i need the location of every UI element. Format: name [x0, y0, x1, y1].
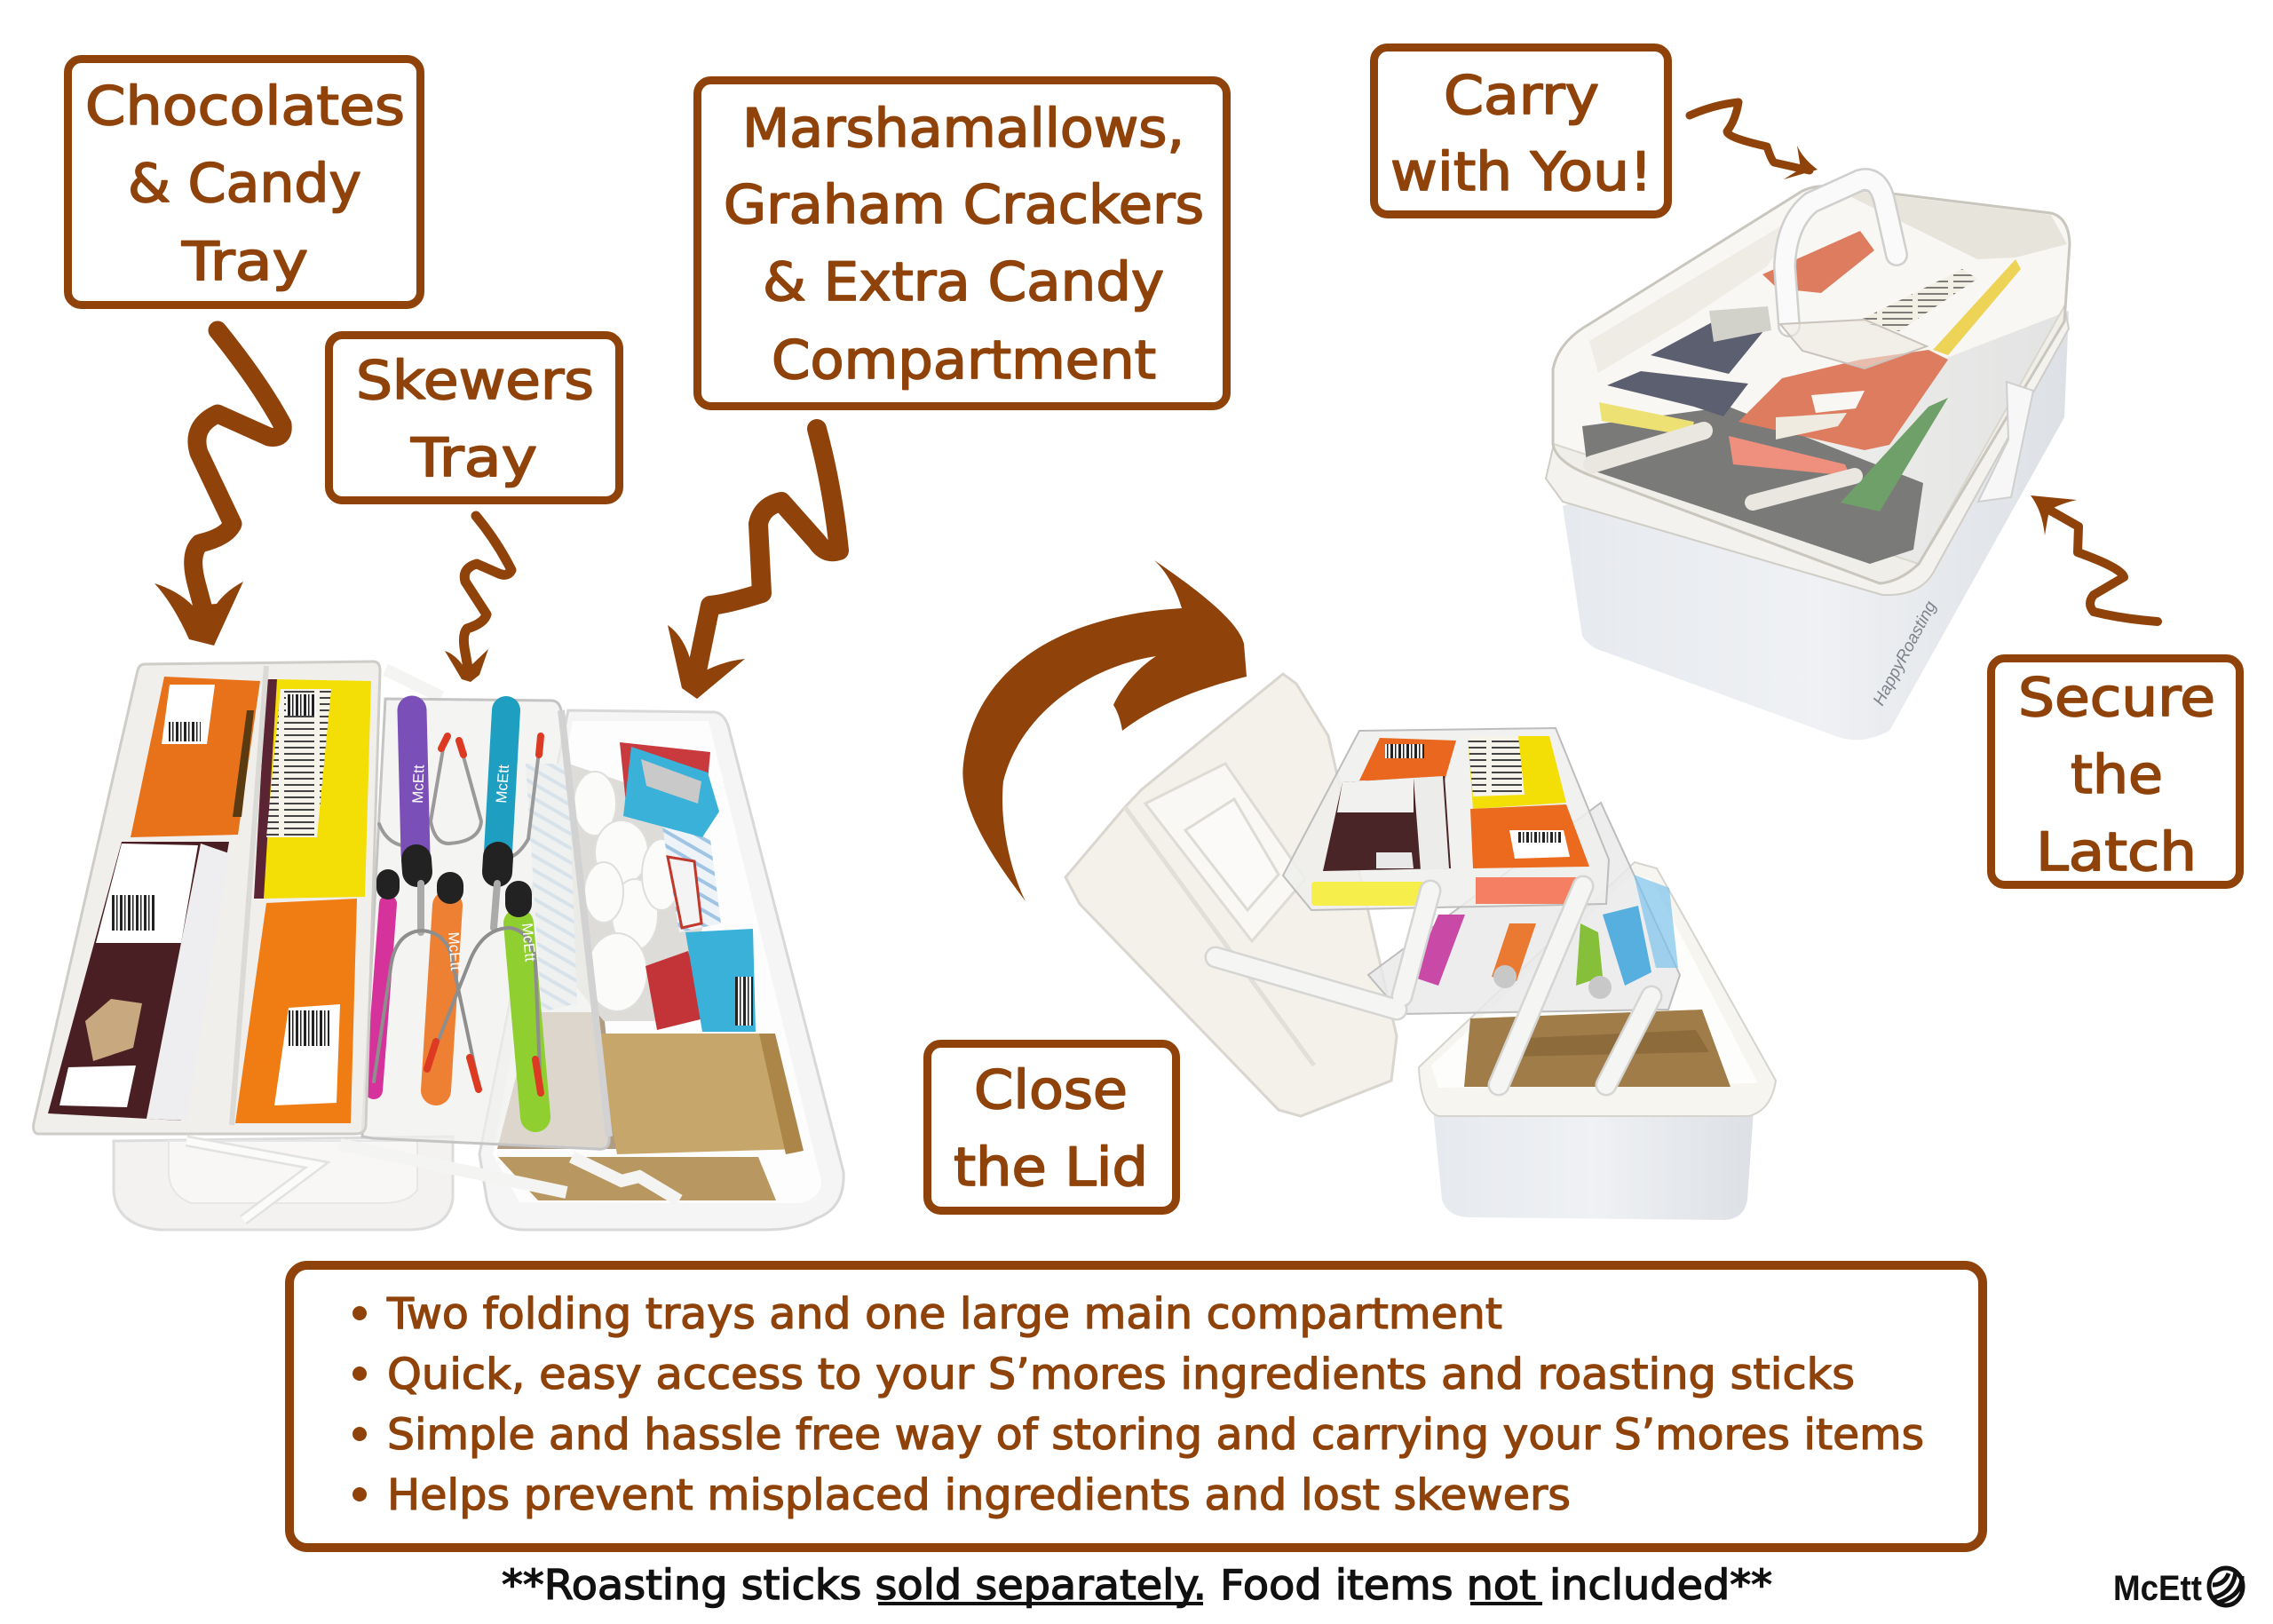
arrow: to skewers tray	[445, 516, 511, 682]
skewers tray	[362, 699, 609, 1149]
logo: McEtt: McEtt	[2113, 1569, 2202, 1608]
panel: feature list: Helps prevent misplaced ingredients and lost skewers	[387, 1470, 1571, 1520]
base	[1419, 862, 1776, 1220]
callout: secure the latch: Secure	[2018, 667, 2215, 729]
latch	[1978, 382, 2033, 502]
snack packs	[620, 742, 710, 804]
bullets	[352, 1306, 367, 1501]
arrow: secure the latch	[2031, 495, 2158, 622]
marshmallows	[568, 764, 710, 1021]
panel: feature list: Two folding trays and one large main compartment	[386, 1289, 1502, 1339]
orange bar	[131, 677, 260, 837]
callout: close the lid: Close	[974, 1059, 1128, 1121]
footnote: **Roasting sticks sold separately. Food items not included**	[502, 1561, 1772, 1609]
arrow: carry with you	[1690, 102, 1818, 179]
callout: skewers tray	[329, 336, 620, 501]
photo: closed caddy: HappyRoasting	[1870, 598, 1941, 709]
callout: skewers tray: Skewers	[356, 350, 594, 412]
callout: chocolates and candy tray: Tray	[181, 231, 308, 293]
callout: secure the latch: Latch	[2036, 821, 2197, 883]
callout: marshmallows compartment: Compartment	[772, 329, 1156, 392]
callout: marshmallows compartment: Graham Crackers	[724, 174, 1204, 236]
lower tray	[1368, 803, 1680, 1014]
arrow: to marshmallow compartment	[668, 429, 839, 699]
roasting sticks	[374, 710, 541, 1117]
contents	[1582, 231, 2021, 564]
callout: carry with you	[1374, 48, 1667, 215]
panel: feature list: Simple and hassle free way of storing and carrying your S’mores items	[387, 1410, 1924, 1460]
photo: open caddy with trays unfolded	[34, 661, 843, 1230]
yellow bar	[254, 679, 279, 899]
arrow: to chocolates tray	[154, 330, 282, 646]
skewers tray: McEtt	[409, 764, 428, 804]
callout: marshmallows compartment: & Extra Candy	[763, 251, 1164, 313]
callout: chocolates and candy tray: Chocolates	[85, 75, 405, 138]
orange bar two	[235, 899, 357, 1123]
chocolate wrapper	[48, 842, 229, 1121]
arrow: close the lid	[962, 560, 1247, 901]
base body	[1563, 311, 2069, 740]
crackers	[497, 1012, 617, 1149]
clear lid	[1553, 186, 2070, 583]
photo: half-open caddy	[1065, 674, 1776, 1220]
callout: close the lid: the Lid	[954, 1137, 1148, 1199]
chocolate tray	[34, 661, 380, 1134]
panel: feature list: Quick, easy access to your S’mores ingredients and roasting sticks	[387, 1350, 1855, 1399]
callout: secure the latch	[1991, 659, 2239, 884]
open lid	[1065, 674, 1397, 1116]
lid of open caddy	[114, 1137, 453, 1230]
callout: carry with you: with You!	[1390, 141, 1652, 203]
callout: marshmallows compartment: Marshamallows,	[742, 98, 1184, 160]
callout: secure the latch: the	[2071, 744, 2163, 806]
white support arms	[1216, 886, 1651, 1085]
panel: feature list	[289, 1265, 1983, 1548]
rim	[1546, 306, 2069, 595]
skewers tray: McEtt	[493, 764, 512, 804]
callout: carry with you: Carry	[1444, 65, 1599, 127]
skewers tray: McEtt	[445, 931, 464, 971]
carry handle	[1785, 179, 1897, 326]
callout: chocolates and candy tray: & Candy	[128, 153, 361, 215]
photo: closed caddy	[1546, 179, 2070, 740]
callout: chocolates and candy tray	[67, 59, 421, 305]
skewers tray: McEtt	[519, 923, 539, 963]
upper chocolate tray	[1283, 728, 1609, 910]
tray hinges	[340, 669, 679, 1200]
callout: skewers tray: Tray	[410, 427, 537, 489]
callout: close the lid	[927, 1044, 1176, 1211]
main compartment	[479, 710, 843, 1230]
callout: marshmallows compartment	[698, 80, 1227, 407]
